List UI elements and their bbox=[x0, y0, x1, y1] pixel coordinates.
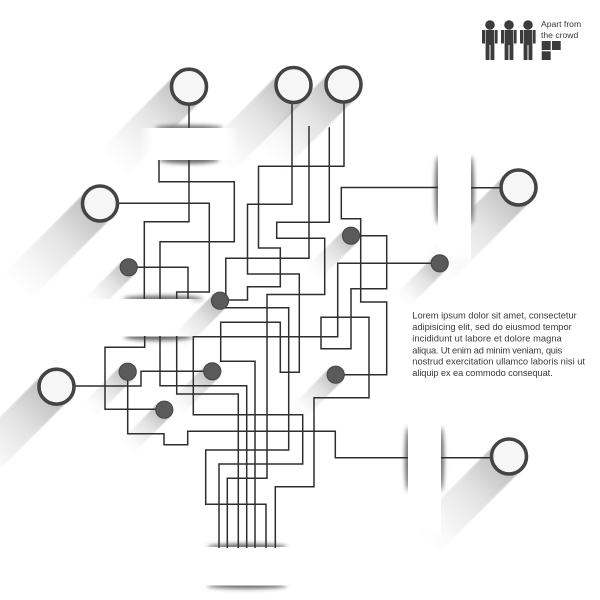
logo text: Apart from bbox=[541, 19, 581, 29]
body text: incididunt ut labore et dolore magna bbox=[412, 334, 563, 344]
logo squares bbox=[542, 41, 561, 60]
body text bbox=[412, 310, 585, 378]
logo text bbox=[541, 19, 581, 40]
long shadows of large circles bbox=[0, 72, 532, 560]
body text: Lorem ipsum dolor sit amet, consectetur bbox=[412, 310, 577, 320]
circuit lines bbox=[74, 103, 500, 548]
small dot nodes bbox=[119, 227, 448, 418]
large circle nodes bbox=[39, 67, 536, 474]
body text: adipisicing elit, sed do eiusmod tempor bbox=[412, 322, 572, 332]
body text: nostrud exercitation ullamco laboris nisi ut bbox=[412, 357, 585, 367]
body text: aliquip ex ea commodo consequat. bbox=[412, 368, 553, 378]
shadow of centre dot bbox=[169, 294, 226, 352]
logo text: the crowd bbox=[541, 30, 578, 40]
long shadows of small dots bbox=[81, 229, 446, 456]
white paper bands bbox=[82, 128, 471, 586]
icon: three people bbox=[482, 20, 536, 60]
body text: aliqua. Ut enim ad minim veniam, quis bbox=[412, 345, 563, 355]
band shadows bbox=[123, 125, 474, 589]
